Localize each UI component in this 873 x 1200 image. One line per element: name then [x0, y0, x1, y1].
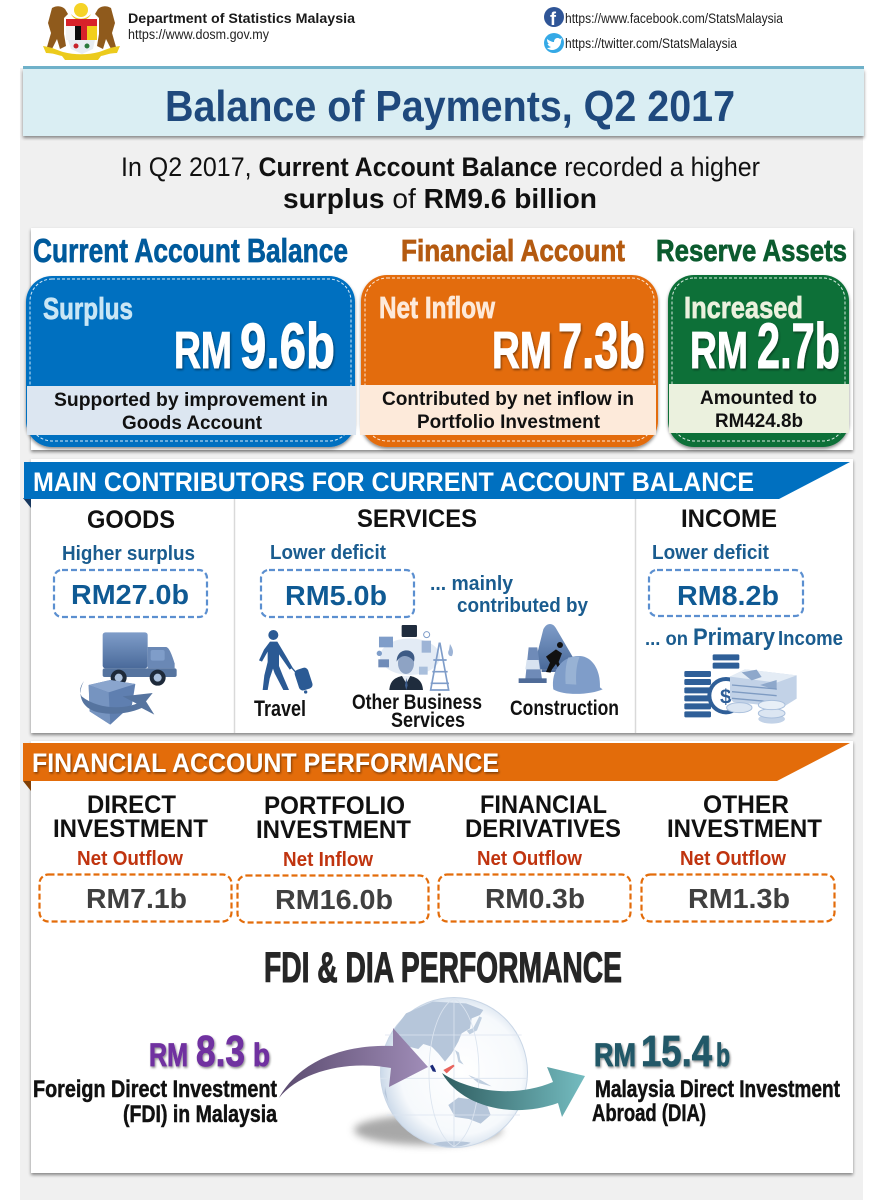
value: RM 9.6b: RM	[174, 322, 232, 380]
text: higher surplus: Higher surplus	[62, 543, 195, 565]
strip: supporting note: Goods Account	[122, 413, 263, 434]
label: net inflow: Net Inflow	[379, 290, 496, 325]
text: foreign direct investment: (FDI) in Malaysia	[123, 1101, 278, 1128]
panel: account summary	[26, 228, 853, 450]
heading: other investment	[667, 791, 822, 843]
value box: RM7.1b: RM7.1b	[86, 883, 187, 914]
strip: supporting note: Supported by improvement in	[54, 390, 328, 411]
value box: RM16.0b: RM16.0b	[275, 884, 393, 915]
text: construction: Construction	[510, 697, 619, 720]
text: summary line 1: In Q2 2017, Current Account Balance recorded a higher	[121, 152, 760, 182]
text: foreign direct investment	[33, 1076, 278, 1128]
heading: current account balance: Current Account Balance	[33, 232, 348, 269]
heading: direct investment	[53, 791, 208, 843]
card: financial account net inflow	[360, 275, 658, 447]
heading: portfolio investment: PORTFOLIO	[264, 792, 405, 820]
value: RM 2.7b: RM	[690, 322, 748, 380]
value: RM 9.6b: 9.6b	[240, 310, 335, 382]
value box: RM0.3b: RM0.3b	[485, 883, 585, 914]
heading: FDI and DIA performance: FDI & DIA PERFORMANCE	[264, 944, 622, 992]
heading: portfolio investment	[256, 792, 411, 844]
text: website: https://www.dosm.gov.my	[128, 27, 269, 42]
value: RM 8.3 b: RM	[149, 1037, 188, 1073]
panel: main contributors	[23, 459, 853, 733]
value box: RM5.0b	[261, 570, 414, 617]
text: facebook url: https://www.facebook.com/StatsMalaysia	[565, 11, 783, 26]
heading: financial derivatives: FINANCIAL	[480, 791, 607, 819]
column: financial derivatives	[438, 791, 630, 922]
text: net outflow: Net Outflow	[77, 848, 183, 870]
value: RM 15.4 b	[594, 1027, 730, 1076]
text: mainly contributed by	[430, 573, 589, 617]
text: net outflow: Net Outflow	[477, 848, 582, 870]
summary sentence	[121, 152, 760, 214]
value: RM 15.4 b: 15.4	[641, 1027, 712, 1076]
icon: business services	[377, 625, 453, 690]
heading: direct investment: INVESTMENT	[53, 815, 208, 843]
heading: title: Balance of Payments, Q2 2017	[165, 82, 735, 131]
text: mainly contributed by: contributed by	[457, 595, 589, 617]
ribbon: main contributors heading: MAIN CONTRIBUTORS FOR CURRENT ACCOUNT BALANCE	[33, 467, 754, 497]
arrow: DIA out of Malaysia	[442, 1067, 585, 1117]
heading: direct investment: DIRECT	[87, 791, 176, 819]
value box: RM1.3b: RM1.3b	[688, 883, 790, 914]
value box: RM27.0b: RM27.0b	[71, 579, 189, 610]
text: mainly contributed by: ... mainly	[430, 573, 514, 595]
card: current account surplus	[26, 276, 356, 447]
text: lower deficit: Lower deficit	[652, 542, 769, 564]
value box: RM1.3b	[642, 874, 834, 922]
text: summary line 2: surplus of RM9.6 billion	[283, 183, 597, 214]
text: on primary income	[645, 624, 843, 651]
panel: financial account performance	[23, 741, 853, 1173]
FDI value and label	[33, 1027, 278, 1128]
value box: RM5.0b: RM5.0b	[285, 580, 387, 611]
value box: RM0.3b	[438, 874, 630, 922]
DIA value and label	[592, 1027, 840, 1127]
strip: supporting note	[27, 386, 356, 435]
icon: facebook: f	[550, 9, 557, 29]
value: RM 7.3b	[492, 310, 645, 382]
text: twitter url: https://twitter.com/StatsMalaysia	[565, 36, 737, 51]
value: RM 7.3b: 7.3b	[558, 310, 645, 382]
text: lower deficit: Lower deficit	[270, 542, 386, 564]
title banner	[23, 66, 864, 136]
icon: globe	[354, 998, 528, 1148]
value: RM 8.3 b	[149, 1027, 270, 1076]
value: RM 15.4 b: RM	[594, 1037, 636, 1073]
strip: reserve amount: RM424.8b	[715, 411, 803, 432]
text: other business services: Services	[391, 709, 465, 732]
column: direct investment	[40, 791, 232, 922]
column: goods	[54, 506, 207, 725]
strip: contributing note	[360, 385, 656, 435]
text: net inflow: Net Inflow	[283, 849, 373, 871]
icon: coins and banknotes: $	[720, 686, 732, 709]
heading: portfolio investment: INVESTMENT	[256, 816, 411, 844]
arrow: FDI into Malaysia	[279, 1028, 428, 1098]
icon: truck and parcel	[80, 632, 177, 725]
text: department name: Department of Statistics Malaysia	[128, 10, 355, 26]
value box: RM27.0b	[54, 570, 207, 617]
heading: financial derivatives: DERIVATIVES	[465, 815, 621, 843]
icon: traveller with suitcase	[259, 630, 314, 694]
card: reserve assets increased	[668, 275, 849, 447]
icon: coins and banknotes	[684, 654, 797, 724]
ribbon: financial account heading: FINANCIAL ACCOUNT PERFORMANCE	[32, 748, 499, 778]
value box: RM8.2b: RM8.2b	[677, 580, 779, 611]
text: other business services	[352, 691, 482, 732]
column: other investment	[642, 791, 834, 922]
header: department logo and name	[43, 3, 355, 60]
strip: reserve amount	[669, 384, 849, 433]
column: income	[645, 505, 843, 724]
value: RM 15.4 b: b	[716, 1037, 730, 1073]
heading: services: SERVICES	[357, 505, 477, 533]
text: malaysia direct investment abroad: Abroad (DIA)	[592, 1100, 706, 1127]
ribbon: financial account heading	[23, 743, 850, 791]
heading: goods: GOODS	[87, 506, 175, 534]
heading: other investment: INVESTMENT	[667, 815, 822, 843]
ribbon: main contributors heading	[23, 462, 850, 508]
text: on primary income: Primary	[693, 624, 776, 651]
text: foreign direct investment: Foreign Direct Investment	[33, 1076, 277, 1103]
column: portfolio investment	[238, 792, 428, 922]
heading: financial account: Financial Account	[401, 233, 625, 268]
text: on primary income: ... on	[645, 629, 688, 650]
value box: RM16.0b	[238, 876, 428, 922]
heading: income: INCOME	[681, 505, 777, 533]
icon: twitter	[544, 33, 564, 53]
value box: RM7.1b	[40, 874, 232, 922]
value: RM 7.3b: RM	[492, 322, 552, 380]
strip: reserve amount: Amounted to	[700, 388, 817, 409]
value: RM 9.6b	[174, 310, 335, 382]
text: on primary income: Income	[778, 628, 843, 650]
icon: construction	[519, 624, 603, 694]
column: services	[254, 505, 619, 732]
value: RM 2.7b	[690, 310, 840, 382]
icon: Malaysian coat of arms	[43, 3, 120, 60]
value box: RM8.2b	[649, 570, 803, 616]
text: travel: Travel	[254, 696, 306, 721]
strip: contributing note: Contributed by net inflow in	[382, 389, 634, 410]
text: net outflow: Net Outflow	[680, 848, 786, 870]
label: increased: Increased	[684, 290, 803, 325]
strip: contributing note: Portfolio Investment	[417, 412, 601, 433]
heading: other investment: OTHER	[703, 791, 789, 819]
value: RM 8.3 b: b	[253, 1037, 270, 1073]
label: surplus: Surplus	[43, 291, 133, 326]
text: malaysia direct investment abroad	[592, 1076, 840, 1127]
value: RM 8.3 b: 8.3	[196, 1027, 245, 1076]
heading: financial derivatives	[465, 791, 621, 843]
text: other business services: Other Business	[352, 691, 482, 714]
icon: facebook	[544, 7, 564, 29]
header: social links	[544, 7, 783, 53]
